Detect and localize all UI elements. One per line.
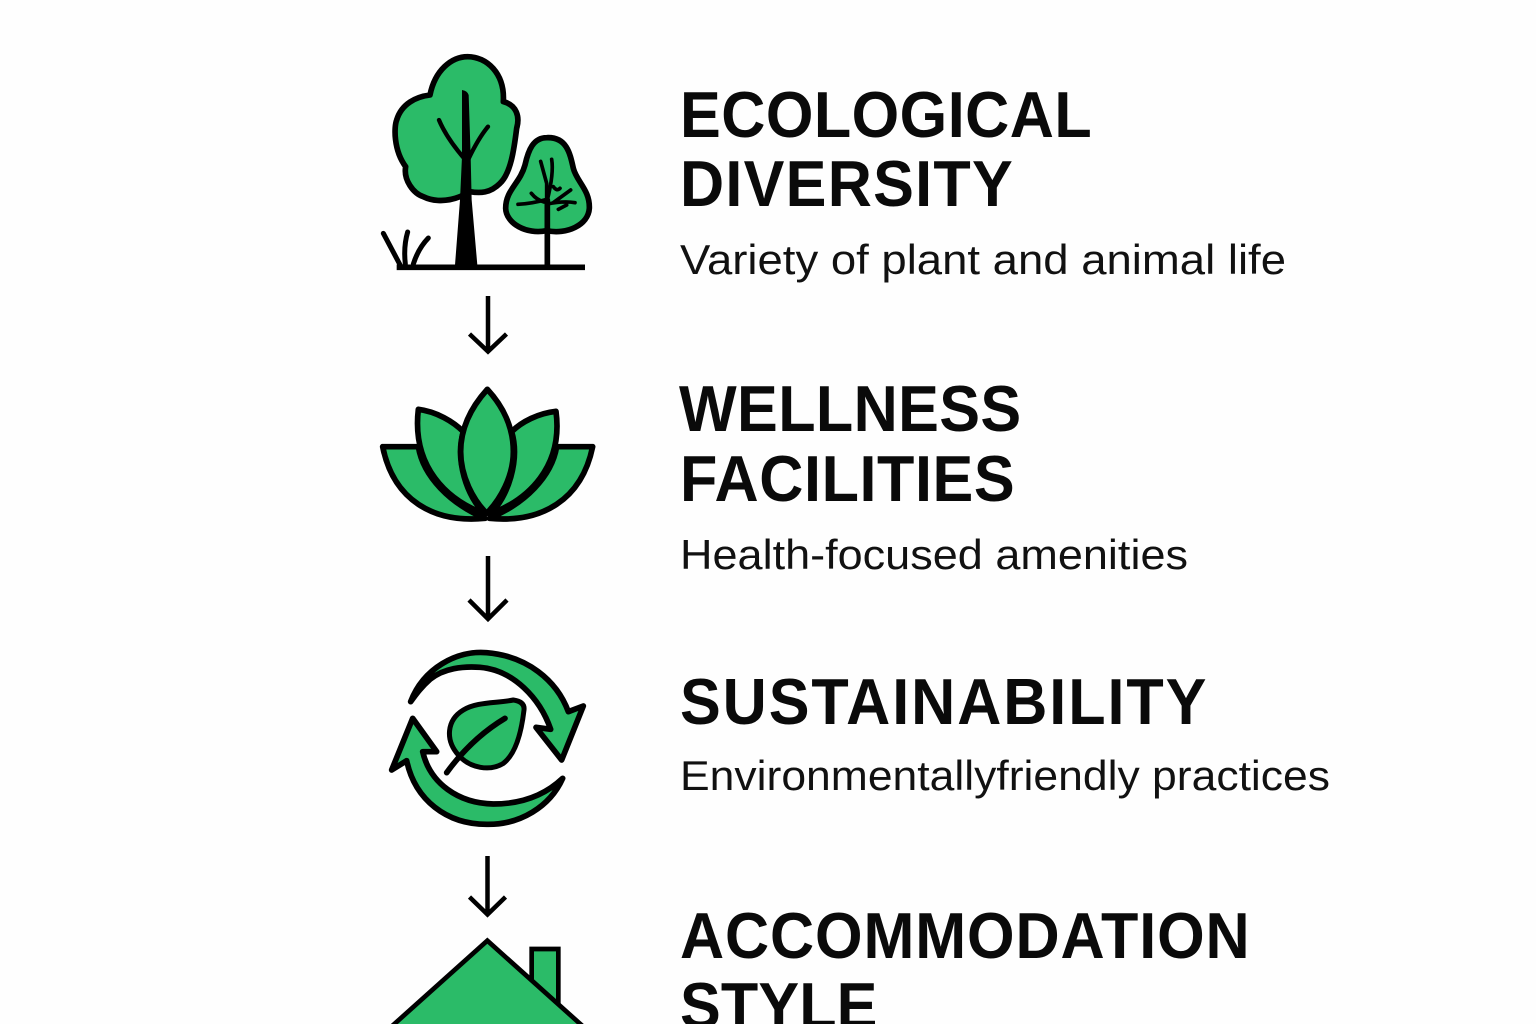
heading: accommodation style bbox=[680, 900, 1250, 1024]
roof bbox=[385, 941, 590, 1024]
heading: accommodation style: ACCOMMODATION bbox=[680, 900, 1250, 972]
arrow 1 bbox=[470, 296, 506, 352]
arrow 3 bbox=[470, 856, 506, 914]
large tree crown bbox=[395, 57, 518, 201]
icon: trees bbox=[383, 57, 589, 267]
ground line bbox=[397, 259, 585, 276]
leaf vein bbox=[447, 718, 505, 773]
large tree trunk and branches bbox=[439, 90, 488, 265]
grass bbox=[383, 232, 428, 266]
centre petal bbox=[461, 389, 513, 513]
small tree crown bbox=[506, 138, 589, 232]
top arrow bbox=[411, 652, 583, 760]
middle left petal bbox=[418, 409, 485, 514]
heading: ecological diversity: DIVERSITY bbox=[680, 148, 1013, 220]
heading: wellness facilities bbox=[679, 373, 1021, 515]
outer right petal bbox=[489, 447, 593, 519]
chimney bbox=[532, 949, 558, 1007]
heading: ecological diversity bbox=[680, 79, 1092, 220]
description: wellness facilities: Health-focused amenities bbox=[680, 531, 1188, 578]
heading: wellness facilities: FACILITIES bbox=[680, 443, 1015, 515]
heading: ecological diversity: ECOLOGICAL bbox=[680, 79, 1092, 151]
heading: sustainability: SUSTAINABILITY bbox=[680, 666, 1206, 738]
outer left petal bbox=[383, 447, 485, 519]
icon: lotus bbox=[383, 389, 593, 519]
description: sustainability: Environmentallyfriendly practices bbox=[680, 752, 1330, 799]
small tree trunk and branches bbox=[518, 159, 575, 265]
leaf bbox=[449, 700, 524, 768]
icon: recycling arrows with leaf bbox=[392, 652, 583, 824]
description: ecological diversity: Variety of plant and animal life bbox=[680, 236, 1286, 283]
middle right petal bbox=[490, 411, 557, 514]
bottom arrow bbox=[392, 718, 563, 824]
icon: house bbox=[385, 941, 590, 1024]
arrow 2 bbox=[469, 556, 507, 619]
heading: wellness facilities: WELLNESS bbox=[679, 373, 1021, 445]
